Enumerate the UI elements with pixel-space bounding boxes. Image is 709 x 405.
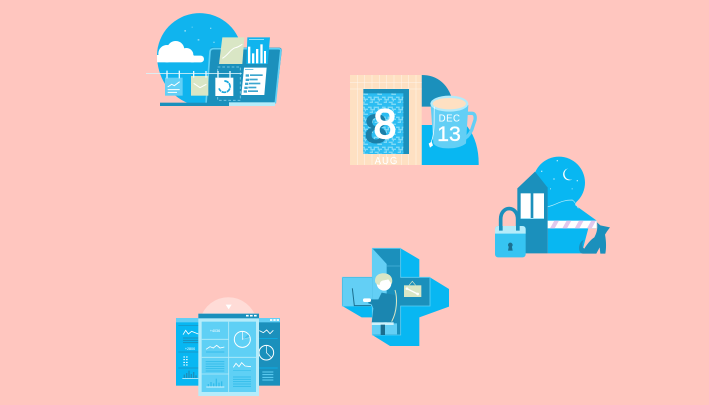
pie chart <box>234 331 250 347</box>
wrench sign <box>404 281 421 297</box>
laptop <box>352 288 371 306</box>
barrier <box>548 221 597 228</box>
laptop base <box>160 103 230 106</box>
stars <box>184 27 215 43</box>
dashed selection <box>218 67 240 100</box>
cross outline <box>342 248 430 335</box>
sparkline two <box>233 363 251 367</box>
dark blue backdrop <box>422 75 454 107</box>
person at laptop <box>352 273 397 335</box>
date number 8: 8 <box>373 101 396 147</box>
icon group: calendar with mug <box>350 75 479 167</box>
clothesline <box>146 72 242 75</box>
mug date: DEC <box>439 113 460 124</box>
bar chart <box>208 379 222 387</box>
hill and body <box>548 193 597 253</box>
pinned sheet: blue chart <box>165 71 183 96</box>
pale dome <box>200 297 256 335</box>
sky circle <box>157 13 242 103</box>
blue bar chart sheet <box>246 37 270 64</box>
calendar frame <box>363 89 409 154</box>
cloud <box>157 41 204 62</box>
text lines <box>206 362 224 371</box>
laptop <box>160 48 282 106</box>
mug <box>429 96 475 148</box>
legs <box>381 325 385 335</box>
triangle marker <box>226 305 232 309</box>
sparkline <box>206 345 224 349</box>
icon group: laptop with cloud and pinned charts <box>146 13 282 106</box>
icon group: dashboard screens <box>176 297 280 396</box>
cross front <box>342 248 430 335</box>
back left panel: +2800 <box>185 347 195 351</box>
cream calendar page <box>350 75 422 165</box>
tea bag <box>431 107 434 142</box>
left arm panel <box>343 278 372 306</box>
stars <box>541 160 578 196</box>
icon group: house, lock and dog <box>495 157 610 257</box>
value label: +4036 <box>210 329 220 333</box>
cross 3D side <box>342 248 449 346</box>
moon <box>563 168 572 180</box>
mug: 13 <box>437 122 461 146</box>
dog <box>579 222 610 254</box>
hand <box>363 298 371 302</box>
white document <box>241 68 267 95</box>
head <box>377 276 391 291</box>
house <box>517 172 548 253</box>
shadow eight: 8 <box>364 105 388 152</box>
pinned sheet: donut chart <box>215 71 233 96</box>
bright blue base <box>422 125 479 165</box>
windows <box>521 193 531 218</box>
torso <box>368 293 395 323</box>
green line chart sheet <box>219 37 244 64</box>
back right panel <box>257 318 280 386</box>
icon group: medical cross with man at laptop <box>342 248 449 346</box>
night circle <box>533 157 585 209</box>
upper shelf line <box>387 265 400 267</box>
chair <box>372 322 394 325</box>
pinned sheet: green chart <box>191 71 208 96</box>
inner left wall <box>372 249 397 334</box>
month label: AUG <box>375 156 397 167</box>
padlock <box>495 209 526 257</box>
